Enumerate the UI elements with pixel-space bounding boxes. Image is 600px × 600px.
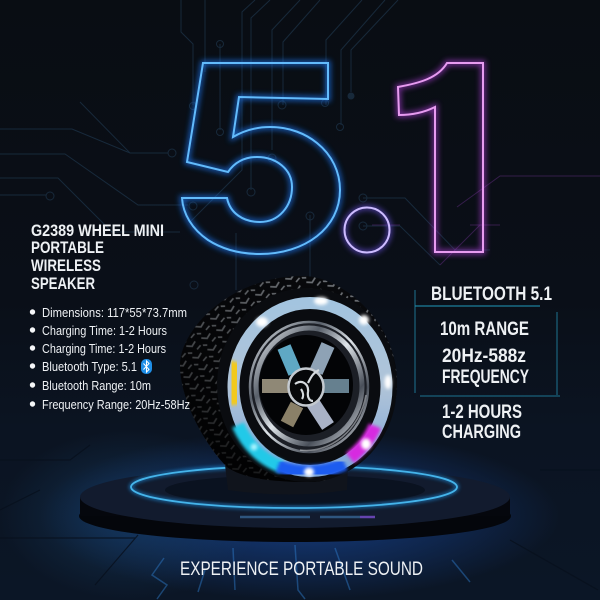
speaker foot: [225, 465, 348, 494]
specification list: [30, 305, 190, 412]
specification list: Charging Time: 1-2 Hours: [42, 323, 167, 338]
floor circuit lines: [152, 545, 470, 599]
magenta circuit traces: [372, 176, 600, 265]
product heading: WIRELESS: [31, 256, 101, 275]
digit 5: [182, 63, 340, 254]
digit 1: [398, 63, 483, 252]
feature: range: 10m RANGE: [440, 319, 529, 340]
specification list: Charging Time: 1-2 Hours: [42, 341, 166, 356]
floor dark seams: [0, 445, 600, 590]
product heading: PORTABLE: [31, 238, 104, 257]
wheel rim: [249, 321, 369, 453]
tire sidewall: [217, 288, 397, 482]
icon: bluetooth badge: [141, 359, 152, 374]
rim reflection highlight: [300, 395, 366, 450]
feature panel frame: [415, 290, 560, 396]
feature: frequency: FREQUENCY: [442, 367, 529, 388]
specification list: Frequency Range: 20Hz-58Hz: [42, 397, 190, 412]
platform: [79, 466, 511, 542]
speaker: [180, 276, 397, 494]
specification list: Bluetooth Range: 10m: [42, 378, 151, 393]
feature: charging: 1-2 HOURS: [442, 402, 522, 423]
tagline: EXPERIENCE PORTABLE SOUND: [180, 559, 423, 580]
neon number 5.1: [182, 63, 483, 254]
circuit board traces: [0, 0, 490, 290]
feature: frequency: 20Hz-588z: [442, 346, 526, 367]
feature: charging: [442, 402, 522, 443]
LED lights: [250, 297, 392, 476]
feature: charging: CHARGING: [442, 422, 521, 443]
specification list: Bluetooth Type: 5.1: [42, 359, 137, 374]
wheel hub: [288, 368, 324, 406]
feature: frequency: [442, 346, 529, 388]
wheel spokes: [262, 345, 349, 426]
product heading: SPEAKER: [31, 274, 95, 293]
LED ring: [233, 303, 386, 472]
product heading: [31, 221, 164, 293]
decimal point: [344, 208, 390, 252]
tire tread: [180, 276, 397, 482]
specification list: Dimensions: 117*55*73.7mm: [42, 305, 187, 320]
feature: bluetooth: BLUETOOTH 5.1: [431, 284, 552, 305]
product heading: G2389 WHEEL MINI: [31, 221, 164, 240]
